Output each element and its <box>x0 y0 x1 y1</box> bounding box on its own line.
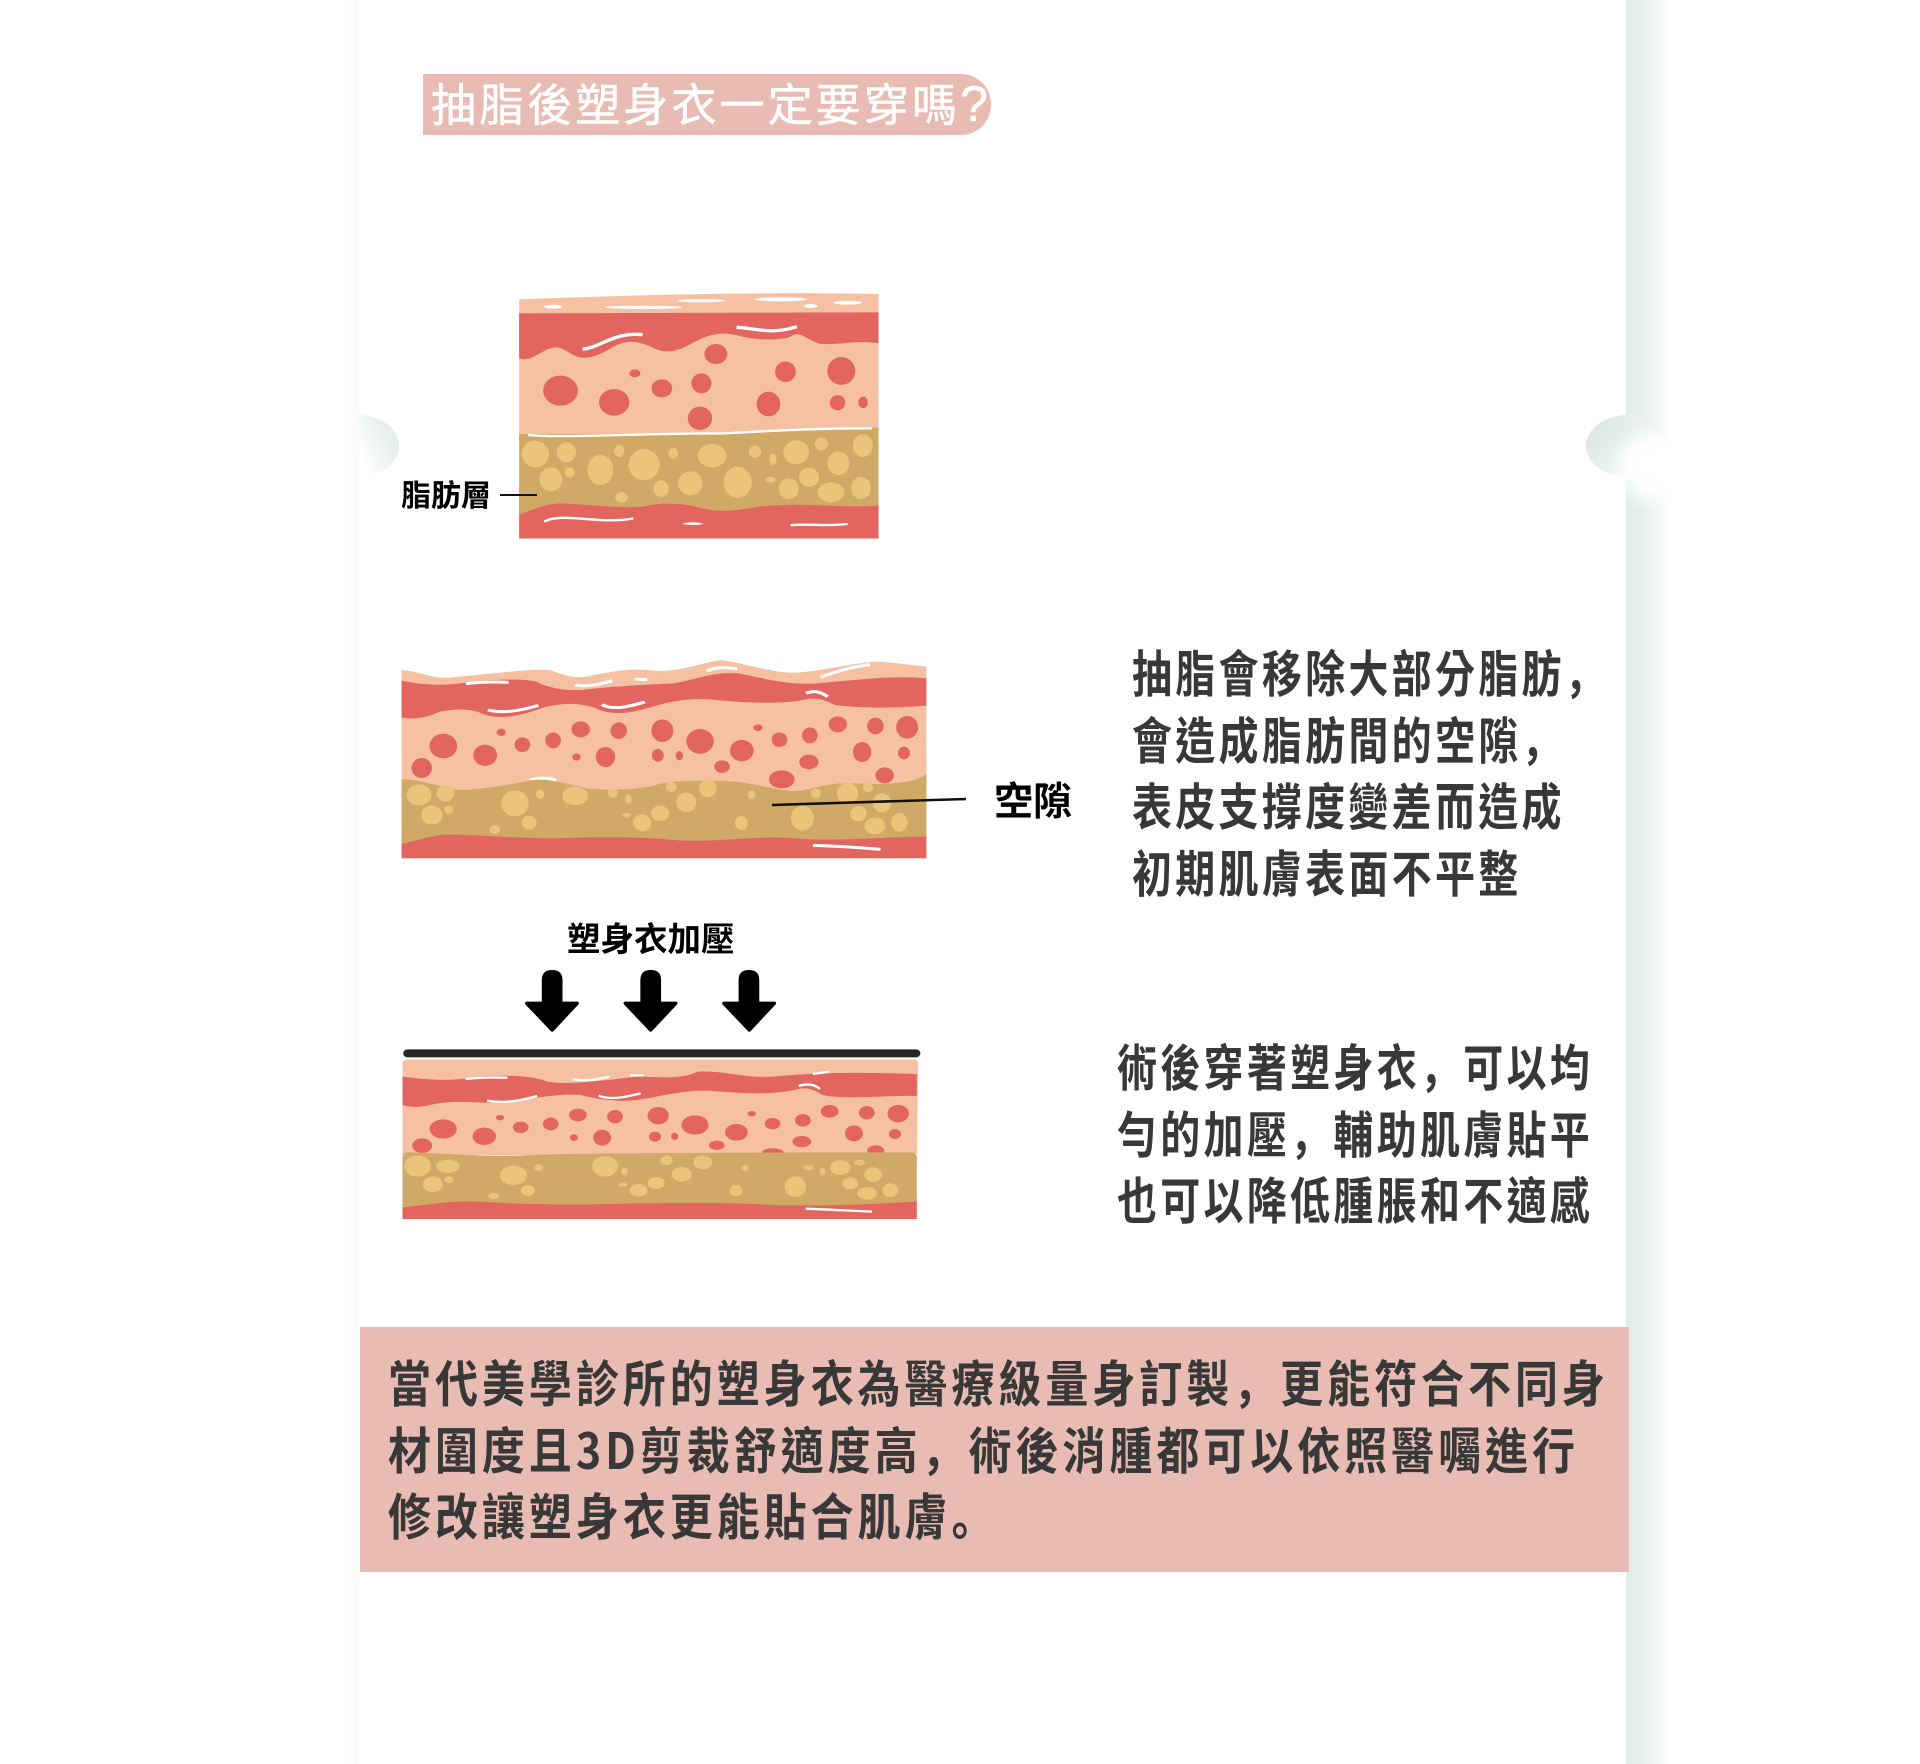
label: gap: 空隙 <box>994 781 1072 824</box>
label: fat layer: 脂肪層 <box>401 480 491 513</box>
label: shapewear compression: 塑身衣加壓 <box>567 922 734 959</box>
callout text: 當代美學診所的塑身衣為醫療級量身訂製，更能符合不同身 <box>388 1345 1609 1417</box>
leader line: fat layer <box>500 494 537 496</box>
compression bar <box>403 1049 920 1057</box>
callout banner <box>360 1327 1629 1572</box>
explanation text: liposuction gaps: 表皮支撐度變差而造成 <box>1132 768 1565 840</box>
explanation text: shapewear benefit: 勻的加壓，輔助肌膚貼平 <box>1117 1096 1593 1168</box>
explanation text: shapewear benefit <box>1117 1029 1593 1234</box>
callout text <box>388 1345 1609 1550</box>
skin illustration 1: normal fat layer <box>519 293 879 539</box>
page right edge band <box>1626 0 1672 1764</box>
explanation text: liposuction gaps: 抽脂會移除大部分脂肪， <box>1132 635 1608 707</box>
explanation text: liposuction gaps: 初期肌膚表面不平整 <box>1132 834 1522 906</box>
explanation text: shapewear benefit: 也可以降低腫脹和不適感 <box>1117 1162 1593 1234</box>
title pill <box>423 74 991 135</box>
explanation text: liposuction gaps: 會造成脂肪間的空隙， <box>1132 702 1565 774</box>
page left edge tint <box>340 0 359 1764</box>
callout text: 材圍度且3D剪裁舒適度高，術後消腫都可以依照醫囑進行 <box>388 1412 1579 1484</box>
explanation text: shapewear benefit: 術後穿著塑身衣，可以均 <box>1117 1029 1593 1101</box>
arrows <box>527 972 774 1030</box>
callout text: 修改讓塑身衣更能貼合肌膚。 <box>388 1478 998 1550</box>
explanation text: liposuction gaps <box>1132 635 1608 906</box>
title text: 抽脂後塑身衣一定要穿嗎? <box>431 76 991 132</box>
